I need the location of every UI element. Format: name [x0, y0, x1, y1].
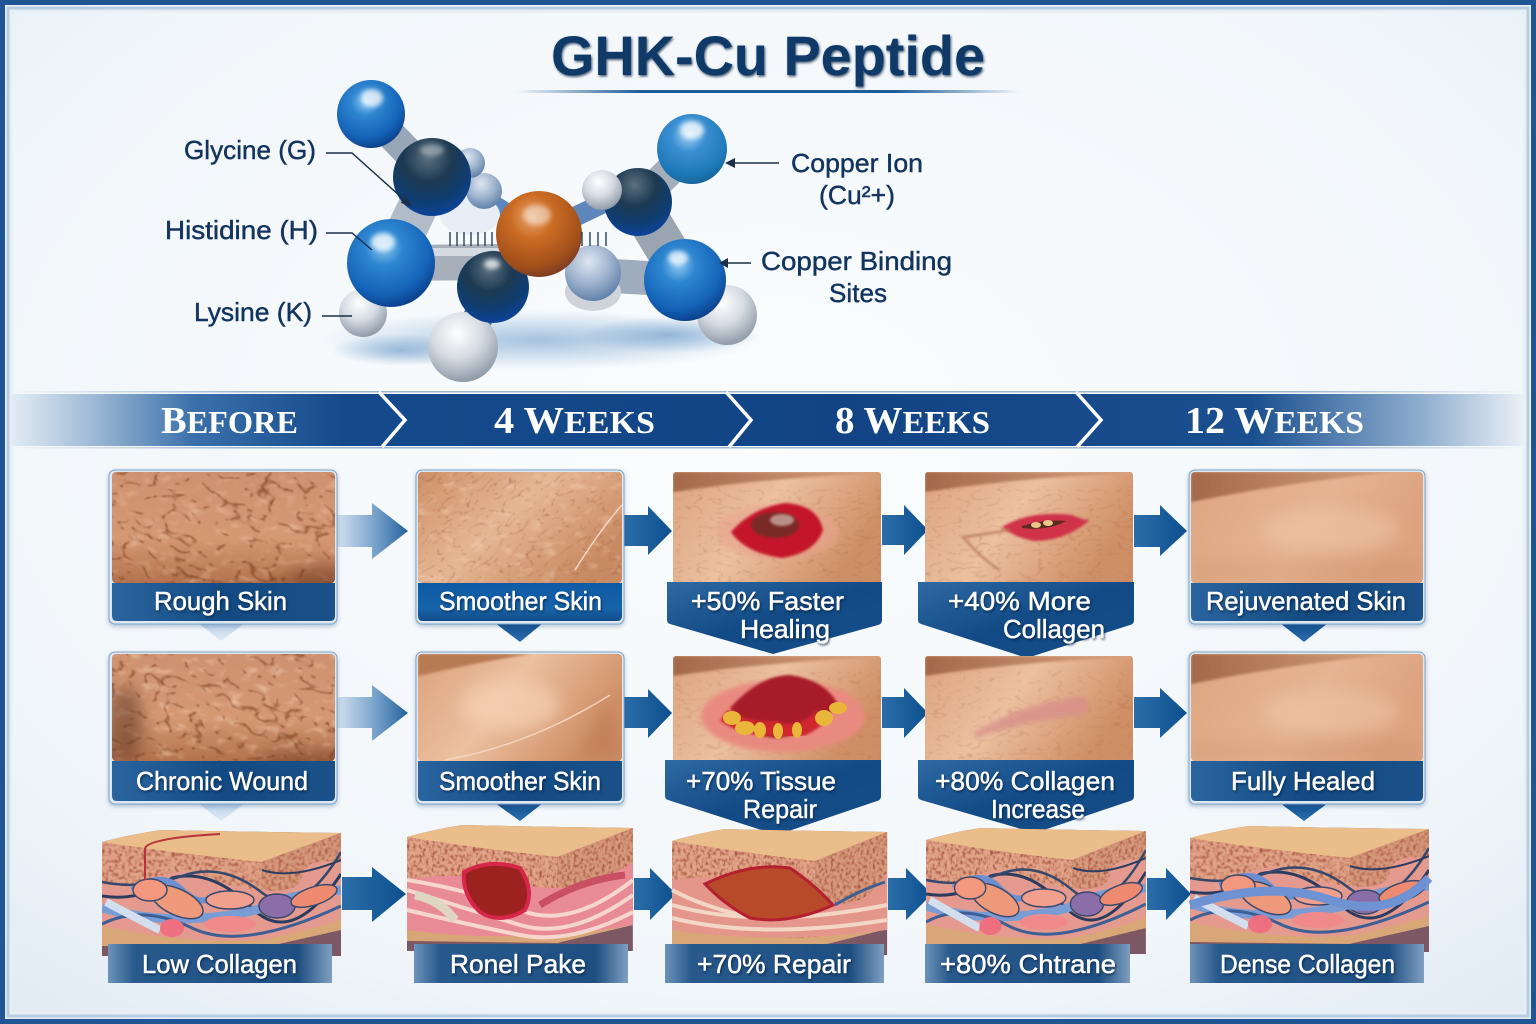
tissue block: Dense Collagen: Dense Collagen	[1220, 949, 1395, 979]
tissue block: Low Collagen	[102, 830, 341, 983]
wound	[1002, 514, 1090, 541]
card: Rough Skin: Rough Skin	[154, 586, 287, 616]
timeline band	[12, 391, 1524, 448]
card: Chronic Wound: Chronic Wound	[136, 766, 308, 796]
band label: 8 weeks: 8 WEEKS	[835, 400, 990, 442]
card: Rejuvenated Skin: Rejuvenated Skin	[1206, 586, 1406, 616]
card: Smoother Skin row 2: Smoother Skin	[439, 766, 601, 796]
molecule diagram	[320, 80, 760, 382]
card: +50% Faster Healing: Healing	[740, 614, 830, 644]
scar	[975, 697, 1088, 738]
band chevrons	[379, 392, 1101, 447]
card: Fully Healed	[1189, 652, 1425, 821]
tissue block: +70% Repair	[665, 829, 887, 983]
card: Smoother Skin row 1: Smoother Skin	[439, 586, 602, 616]
card: Smoother Skin row 1	[413, 469, 627, 642]
tissue block: Ronel Pake: Ronel Pake	[450, 949, 586, 979]
arrow row 3	[342, 867, 1191, 922]
card: +70% Tissue Repair: +70% Tissue	[686, 766, 836, 796]
wound: yellow tissue	[723, 702, 847, 739]
label: Copper Ion: (Cu²+)	[819, 180, 895, 210]
arrow row 1	[337, 503, 1187, 559]
band label: 12 weeks: 12 WEEKS	[1185, 400, 1364, 442]
molecule bonds	[365, 114, 727, 347]
card: +50% Faster Healing: +50% Faster	[691, 586, 844, 616]
wound	[701, 680, 865, 752]
label: Copper Binding Sites	[719, 246, 952, 308]
molecule atoms	[337, 80, 757, 382]
tissue block: +70% Repair: +70% Repair	[697, 949, 851, 979]
band label: Before: BEFORE	[161, 400, 298, 442]
card: Fully Healed: Fully Healed	[1231, 766, 1375, 796]
card: Chronic Wound	[106, 651, 340, 821]
label: Histidine (H): Histidine (H)	[165, 215, 318, 245]
card: Rough Skin	[106, 469, 340, 641]
title: GHK-Cu Peptide	[551, 24, 985, 87]
label: Lysine (K): Lysine (K)	[194, 297, 312, 327]
molecule shadow	[320, 310, 760, 370]
label: Copper Binding Sites: Copper Binding	[761, 246, 952, 276]
label: Glycine (G)	[184, 135, 413, 207]
label: Copper Ion: Copper Ion	[791, 148, 923, 178]
card: +40% More Collagen: +40% More	[948, 586, 1091, 616]
card: +70% Tissue Repair: Repair	[743, 794, 817, 824]
card: +50% Faster Healing	[667, 472, 882, 654]
tissue block: Low Collagen: Low Collagen	[142, 949, 297, 979]
tissue block: +80% Chtrane	[925, 828, 1146, 983]
label: Copper Binding Sites: Sites	[829, 278, 887, 308]
card: +40% More Collagen	[918, 472, 1134, 658]
card: Smoother Skin row 2	[416, 652, 624, 821]
band label: 4 weeks: 4 WEEKS	[494, 400, 655, 442]
tissue block: Dense Collagen	[1190, 826, 1429, 983]
label: Copper Ion	[725, 148, 923, 210]
card: +70% Tissue Repair	[665, 656, 881, 835]
tissue block: Ronel Pake	[407, 825, 633, 983]
wound	[716, 504, 840, 560]
label: Glycine (G): Glycine (G)	[184, 135, 316, 165]
label: Histidine (H)	[165, 215, 372, 250]
card: +80% Collagen Increase: Increase	[991, 794, 1085, 824]
card: +80% Collagen Increase: +80% Collagen	[935, 766, 1115, 796]
card: +80% Collagen Increase	[918, 656, 1134, 833]
sphere highlights	[361, 89, 704, 269]
card: Rejuvenated Skin	[1189, 470, 1425, 642]
card: +40% More Collagen: Collagen	[1003, 614, 1105, 644]
arrow row 2	[337, 685, 1187, 741]
tissue block: +80% Chtrane: +80% Chtrane	[940, 949, 1116, 979]
